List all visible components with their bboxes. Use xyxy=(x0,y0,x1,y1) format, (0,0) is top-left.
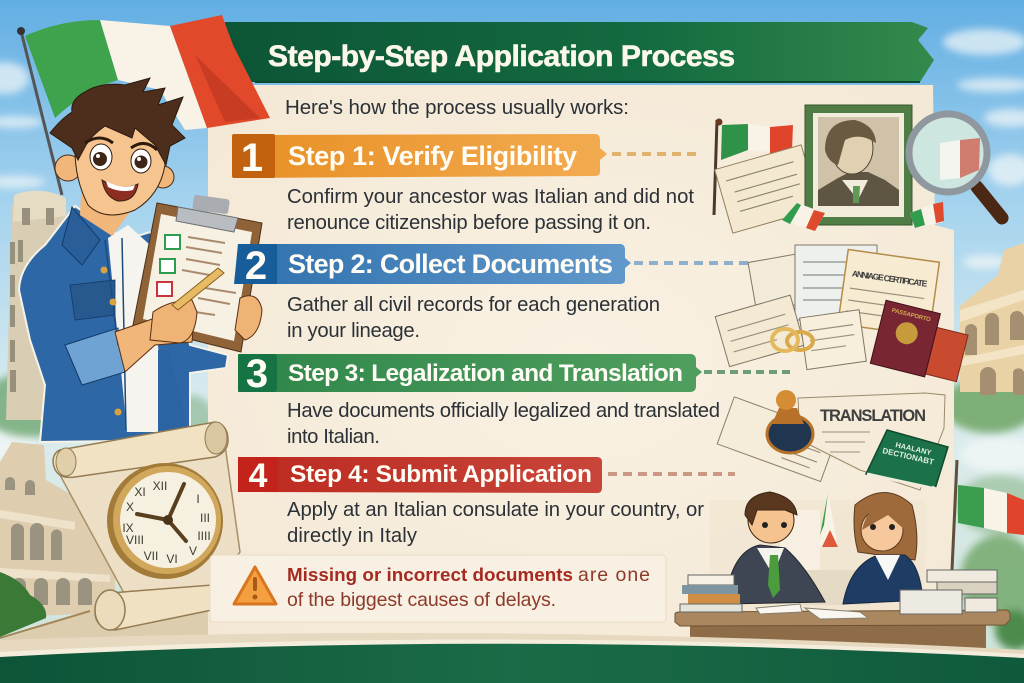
step 2 xyxy=(234,244,760,342)
icon: clock: VII xyxy=(144,549,158,563)
icon: clock: I xyxy=(196,492,200,506)
step 3: Step 3: Legalization and Translation xyxy=(288,360,683,387)
illustration: translation documents xyxy=(717,390,948,490)
tree foliage left xyxy=(0,373,215,445)
icon: clock: VIII xyxy=(126,533,144,547)
illustration: document pile xyxy=(715,245,971,385)
clipboard xyxy=(133,195,262,352)
title: Step-by-Step Application Process xyxy=(268,40,735,73)
icon: clock: IX xyxy=(122,521,134,535)
warning callout: are one xyxy=(578,564,650,586)
woman xyxy=(843,492,923,604)
leaning tower xyxy=(6,191,70,420)
small flag on pole xyxy=(714,118,793,215)
arm and hands xyxy=(115,268,262,372)
icon: rubber stamp xyxy=(767,390,813,453)
icon: clock: V xyxy=(189,544,197,558)
step 2: 2 xyxy=(245,244,267,288)
colosseum right xyxy=(960,243,1024,395)
step 2: in your lineage. xyxy=(287,320,420,342)
office backdrop xyxy=(710,500,925,615)
step 3: into Italian. xyxy=(287,426,380,448)
icon: clock: XI xyxy=(134,485,146,499)
panel: paper background xyxy=(208,85,954,640)
icon: green dictionary: HAALANY xyxy=(895,440,932,457)
icon: green dictionary: DECTIONABT xyxy=(882,446,935,467)
step 4 xyxy=(238,457,735,547)
icon: clock: III xyxy=(200,511,210,525)
desk xyxy=(675,610,1010,652)
certificate xyxy=(715,145,819,233)
icon: passport xyxy=(870,300,971,385)
ground and bushes left xyxy=(0,572,215,656)
step 4: Apply at an Italian consulate in your country, or xyxy=(287,499,704,521)
icon: magnifying glass xyxy=(909,114,1002,218)
icon: clock: XII xyxy=(153,479,167,493)
character: boy with clipboard xyxy=(19,78,262,442)
step 1: renounce citizenship before passing it on. xyxy=(287,212,651,234)
small flags xyxy=(782,202,944,231)
icon: clock: X xyxy=(126,500,134,514)
step 4: 4 xyxy=(249,457,268,495)
jacket body xyxy=(19,206,228,442)
step 1: 1 xyxy=(241,136,263,180)
illustration: document pile: ANNIAGE CERTIFICATE xyxy=(851,268,928,289)
step 2: Step 2: Collect Documents xyxy=(288,249,613,279)
warning callout: of the biggest causes of delays. xyxy=(287,589,556,611)
warning callout: Missing or incorrect documents xyxy=(287,564,573,585)
man xyxy=(725,492,825,604)
scroll with clock xyxy=(53,422,240,630)
icon: clock: IIII xyxy=(197,529,211,543)
icon: green dictionary xyxy=(866,430,948,489)
hair xyxy=(50,78,185,165)
paper scroll xyxy=(53,422,240,630)
portrait frame xyxy=(805,105,912,225)
pole flag xyxy=(952,460,1024,570)
illustration: ancestor documents xyxy=(714,105,1002,233)
bottom band xyxy=(0,633,1024,683)
tree foliage right xyxy=(942,377,1024,650)
step 4: directly in Italy xyxy=(287,525,418,547)
step 1: Confirm your ancestor was Italian and did not xyxy=(287,186,694,208)
flag: large Italian flag xyxy=(17,15,270,195)
step 3: 3 xyxy=(246,352,268,396)
step 3 xyxy=(238,352,790,448)
head xyxy=(50,78,185,236)
stamp text: TRANSLATION xyxy=(820,407,926,425)
colosseum left xyxy=(0,442,115,618)
step 1: Step 1: Verify Eligibility xyxy=(288,141,577,171)
icon: wedding rings xyxy=(772,329,813,351)
title banner xyxy=(225,22,934,82)
step 3: Have documents officially legalized and translated xyxy=(287,400,720,422)
illustration: consulate desk xyxy=(675,460,1024,652)
books and papers xyxy=(680,570,997,619)
icon: clock: VI xyxy=(166,552,178,566)
desk flag xyxy=(819,493,838,547)
step 4: Step 4: Submit Application xyxy=(290,461,592,488)
step 2: Gather all civil records for each generation xyxy=(287,294,660,316)
mouth xyxy=(102,180,138,201)
eyes xyxy=(90,144,112,170)
warning callout xyxy=(210,555,666,622)
intro text: Here's how the process usually works: xyxy=(285,96,629,119)
icon: clock xyxy=(107,463,223,579)
icon: warning triangle xyxy=(234,567,276,604)
clouds xyxy=(0,29,1024,473)
step 1 xyxy=(232,134,698,234)
icon: passport: PASSAPORTO xyxy=(891,308,931,324)
